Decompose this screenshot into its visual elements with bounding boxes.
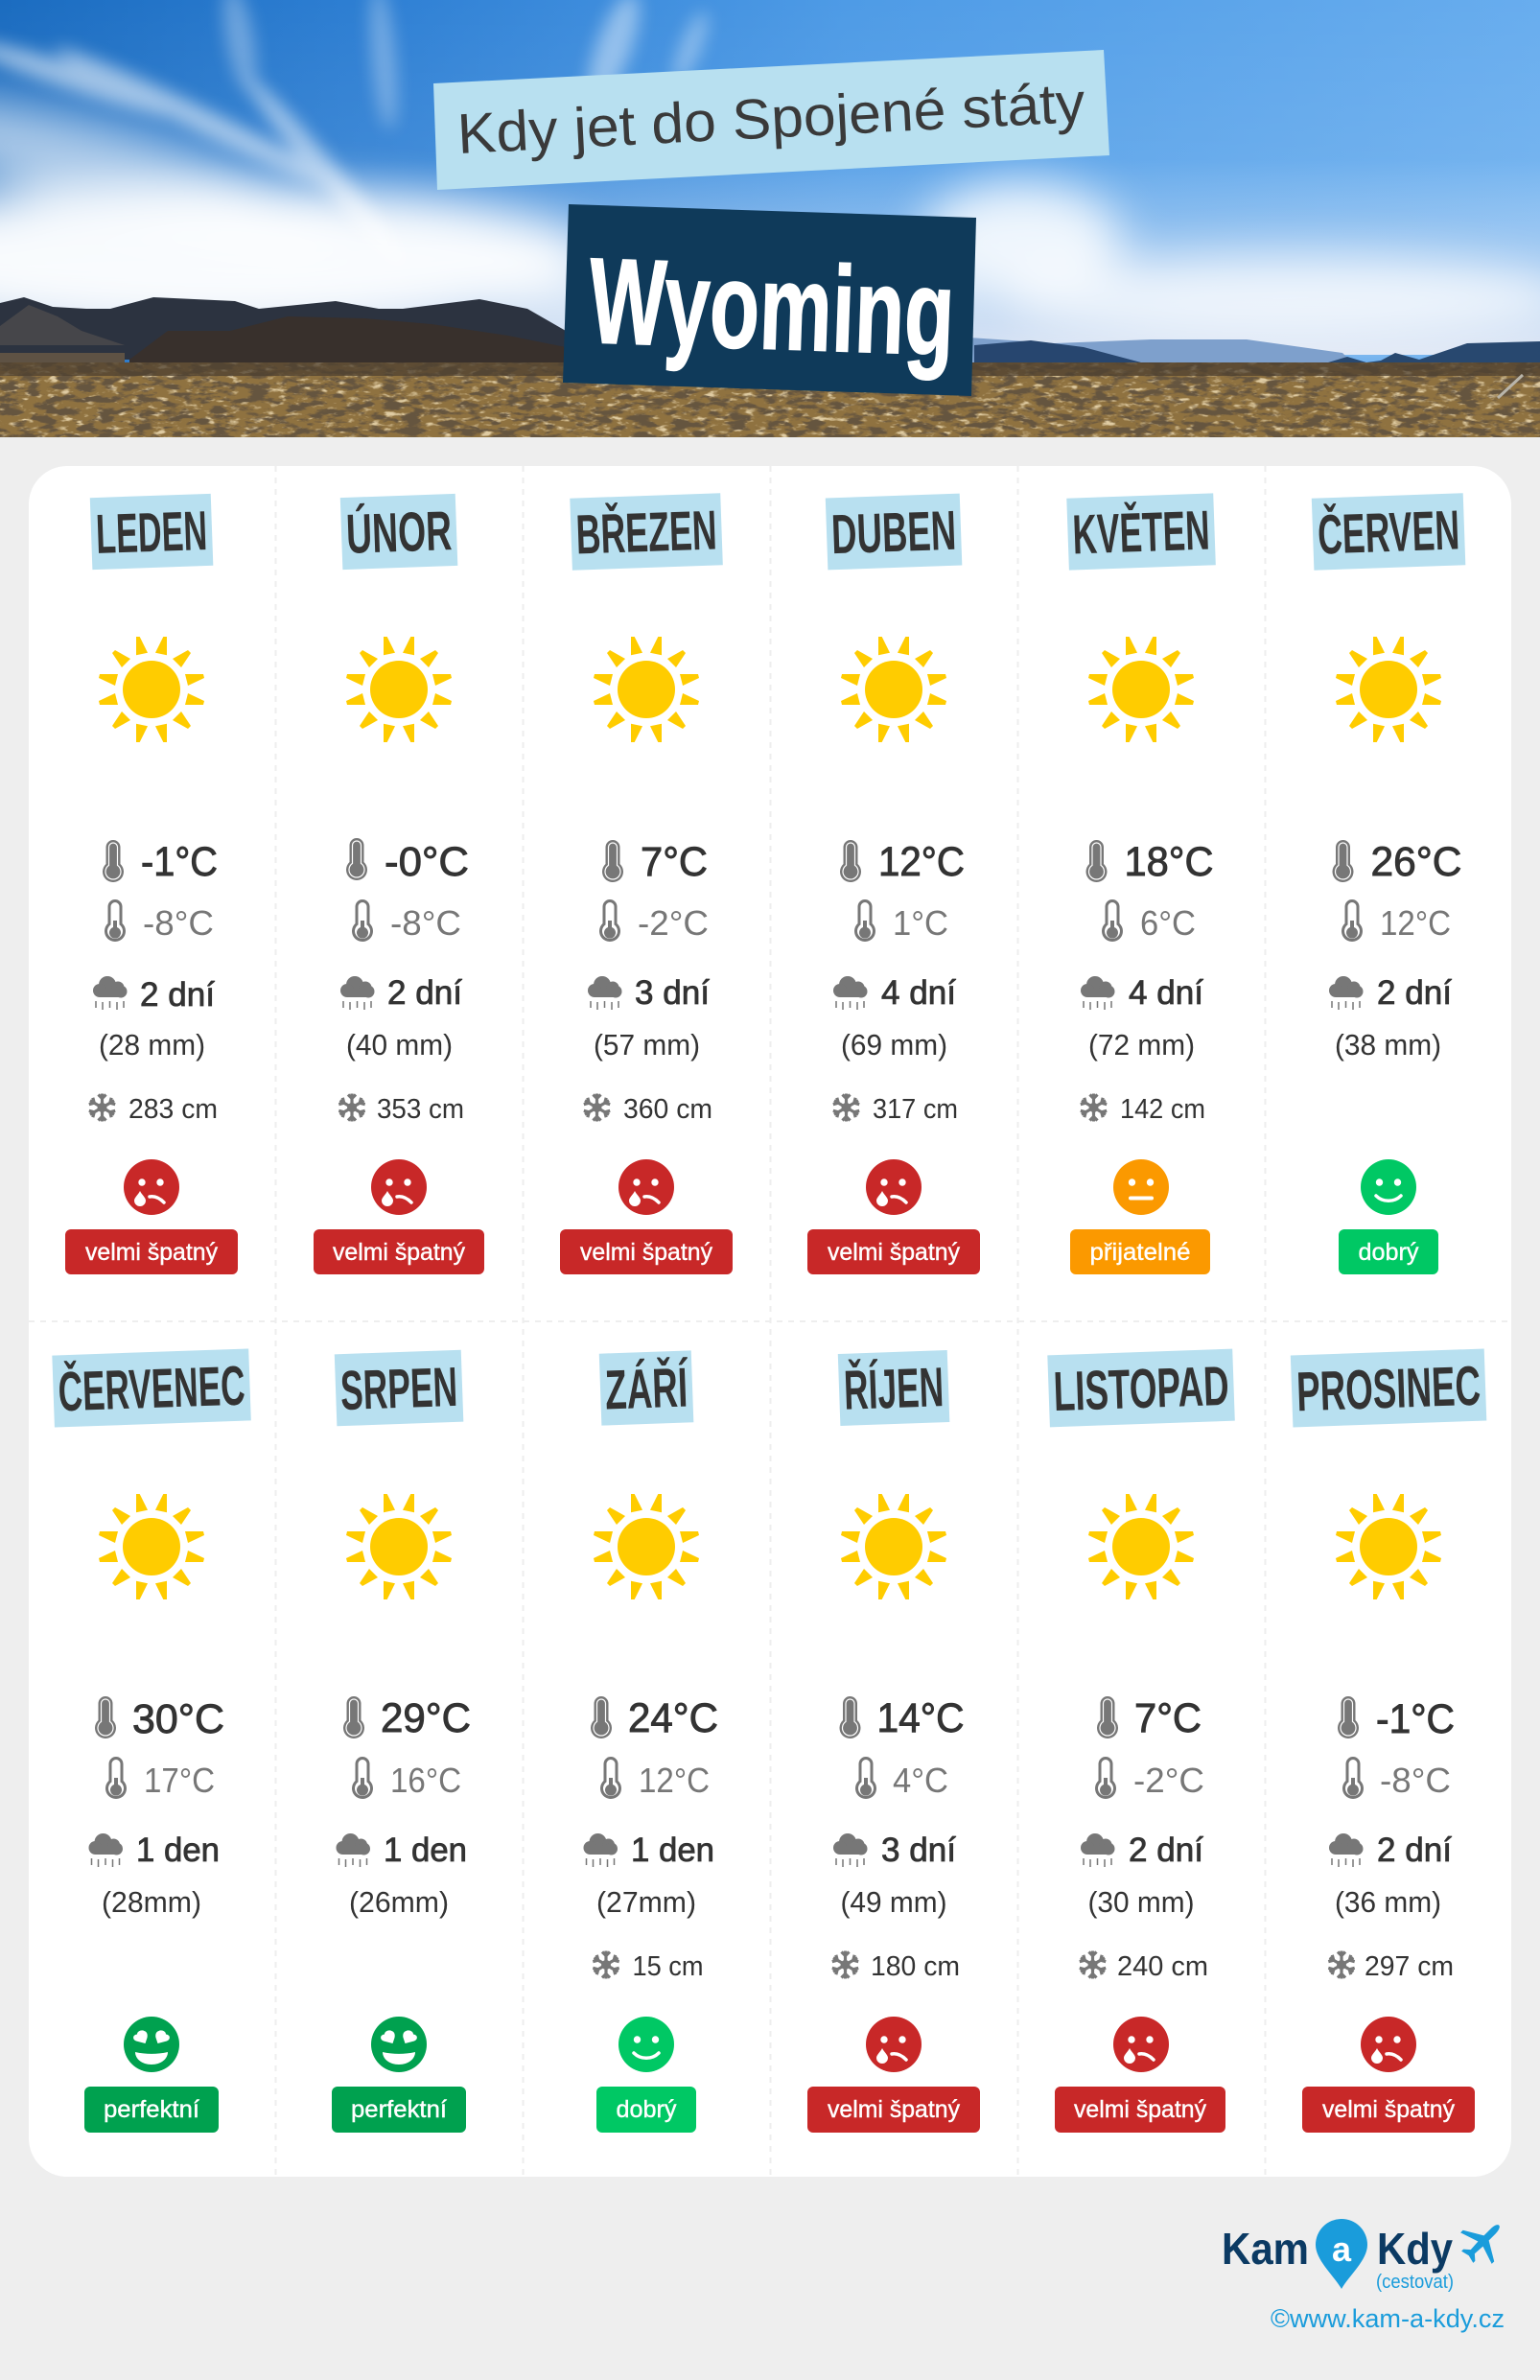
snowfall [1327, 1950, 1454, 1982]
month: Prosinec [1291, 1348, 1486, 2133]
snowfall: 353 cm [377, 1094, 464, 1125]
rating face [1113, 1159, 1169, 1215]
heading: ÚNOR [345, 500, 453, 566]
min temperature: 12°C [639, 1761, 710, 1800]
rating pill: velmi špatný [828, 2096, 960, 2123]
rating pill: velmi špatný [333, 1239, 465, 1266]
max temperature [591, 1695, 718, 1741]
rating face [866, 2017, 922, 2072]
month: Březen [560, 493, 733, 1274]
icon: sun [346, 1494, 452, 1599]
heading [599, 1350, 693, 1426]
rating face [618, 1159, 674, 1215]
rating pill: velmi špatný [1322, 2096, 1455, 2123]
max temperature: 14°C [876, 1695, 965, 1741]
rain days [1081, 974, 1203, 1012]
rain days [1329, 1832, 1452, 1869]
snowfall: 317 cm [873, 1094, 958, 1125]
rain days: 4 dní [1129, 974, 1203, 1012]
max temperature: -1°C [141, 839, 218, 885]
icon: sun [1088, 637, 1194, 742]
heading: KVĚTEN [1071, 500, 1211, 566]
icon: sun [1336, 637, 1441, 742]
icon: map pin: a [1332, 2229, 1352, 2269]
rain days: 2 dní [387, 974, 462, 1012]
state name label: Wyoming [563, 204, 976, 396]
snowfall: 142 cm [1120, 1094, 1205, 1125]
rain days [93, 976, 215, 1014]
rainfall: (26mm) [349, 1885, 449, 1919]
max temperature [840, 1695, 965, 1741]
min temperature: -8°C [1380, 1761, 1451, 1800]
rating pill [65, 1229, 238, 1274]
icon: sun [99, 637, 204, 742]
max temperature [840, 839, 965, 885]
rainfall: (38 mm) [1335, 1028, 1441, 1062]
rain days: 1 den [631, 1832, 714, 1869]
rating face [618, 2017, 674, 2072]
rating pill [1339, 1229, 1438, 1274]
rating face [866, 1159, 922, 1215]
min temperature: 16°C [390, 1761, 461, 1800]
max temperature: 18°C [1124, 839, 1214, 885]
rain days: 2 dní [1377, 974, 1452, 1012]
icon: sun [346, 637, 452, 742]
max temperature: 12°C [878, 839, 965, 885]
heading: DUBEN [830, 500, 957, 566]
logo: Kam a Kdy: Kam [1222, 2224, 1309, 2274]
rain days [833, 1832, 956, 1869]
month: Červenec [52, 1348, 251, 2133]
icon: sun [594, 637, 699, 742]
month: Květen [1066, 493, 1216, 1274]
rating face [1113, 2017, 1169, 2072]
min temperature: 4°C [893, 1761, 948, 1800]
snowfall [832, 1093, 958, 1125]
rating face [1361, 1159, 1416, 1215]
icon: sun [841, 637, 946, 742]
heading [1312, 493, 1465, 571]
rain days: 2 dní [140, 976, 215, 1014]
rating pill [84, 2087, 219, 2133]
min temperature: -2°C [638, 903, 709, 943]
rainfall: (28mm) [102, 1885, 201, 1919]
website credit: ©www.kam-a-kdy.cz [1271, 2304, 1505, 2333]
heading [838, 1350, 949, 1426]
rating pill [807, 1229, 980, 1274]
snowfall [831, 1950, 960, 1982]
icon: sun [594, 1494, 699, 1599]
rain days: 3 dní [635, 974, 710, 1012]
snowfall [1079, 1950, 1208, 1982]
month: Srpen [332, 1350, 471, 2133]
max temperature [343, 1695, 471, 1741]
snowfall [592, 1950, 704, 1982]
icon: sun [841, 1494, 946, 1599]
rain days [88, 1832, 220, 1869]
snowfall: 360 cm [623, 1094, 712, 1125]
state name label: Wyoming: Wyoming [587, 232, 957, 381]
rating face [371, 1159, 427, 1215]
rain days: 3 dní [881, 1832, 956, 1869]
max temperature: 7°C [641, 839, 708, 885]
rain days [1081, 1832, 1203, 1869]
min temperature [600, 1757, 710, 1800]
heading: ČERVENEC [58, 1355, 246, 1423]
logo: Kam a Kdy: (cestovat) [1376, 2272, 1454, 2293]
min temperature: 6°C [1140, 903, 1196, 943]
rainfall: (36 mm) [1335, 1885, 1441, 1919]
rating pill [1302, 2087, 1475, 2133]
snowfall [1080, 1093, 1205, 1125]
rating face [1361, 2017, 1416, 2072]
rainfall: (49 mm) [840, 1885, 947, 1919]
max temperature [1097, 1695, 1202, 1741]
rain days: 2 dní [1377, 1832, 1452, 1869]
heading [1066, 493, 1216, 571]
heading [1047, 1349, 1235, 1427]
rating face [124, 2017, 179, 2072]
rainfall: (27mm) [596, 1885, 696, 1919]
snowfall: 240 cm [1117, 1951, 1208, 1982]
rainfall: (72 mm) [1088, 1028, 1195, 1062]
title label: Kdy jet do Spojené státy [433, 50, 1109, 190]
min temperature: -8°C [390, 903, 461, 943]
snowfall [88, 1093, 218, 1125]
heading [90, 494, 213, 570]
rain days [583, 1832, 714, 1869]
min temperature: -8°C [143, 903, 214, 943]
rating face [371, 2017, 427, 2072]
rating pill: perfektní [104, 2096, 199, 2123]
max temperature: -1°C [1376, 1696, 1455, 1742]
heading: LISTOPAD [1053, 1355, 1230, 1423]
mountains [0, 297, 566, 360]
max temperature: 26°C [1371, 839, 1461, 885]
heading: SRPEN [339, 1356, 458, 1422]
min temperature [1342, 1757, 1451, 1800]
max temperature [346, 838, 469, 885]
month: Duben [807, 494, 980, 1274]
max temperature: 7°C [1134, 1695, 1202, 1741]
rainfall: (69 mm) [841, 1028, 947, 1062]
max temperature [602, 839, 708, 885]
rainfall: (30 mm) [1087, 1885, 1195, 1919]
panel: monthly climate table [29, 466, 1511, 2177]
logo: Kam a Kdy [1222, 2209, 1515, 2293]
rain days [336, 1832, 467, 1869]
rain days: 2 dní [1129, 1832, 1203, 1869]
min temperature [855, 1757, 948, 1800]
title label: Kdy jet do Spojené státy: Kdy jet do Spojené státy [455, 71, 1086, 166]
heading: ŘÍJEN [843, 1356, 945, 1422]
max temperature: 24°C [628, 1695, 718, 1741]
month: Červen [1312, 493, 1465, 1274]
month: Únor [314, 494, 484, 1274]
rating pill: velmi špatný [828, 1239, 960, 1266]
icon: map pin [1316, 2219, 1367, 2289]
rating pill [332, 2087, 466, 2133]
prairie ground [0, 362, 1540, 437]
min temperature: -2°C [1133, 1761, 1204, 1800]
min temperature [1095, 1757, 1204, 1800]
rating face [124, 1159, 179, 1215]
rainfall: (57 mm) [594, 1028, 700, 1062]
snowfall: 283 cm [128, 1094, 218, 1125]
rating pill [560, 1229, 733, 1274]
month: Říjen [807, 1350, 980, 2133]
rating pill [1070, 1229, 1210, 1274]
max temperature [1333, 839, 1461, 885]
rainfall: (28 mm) [99, 1028, 205, 1062]
min temperature [1102, 899, 1196, 943]
rain days: 1 den [136, 1832, 220, 1869]
month: Listopad [1047, 1349, 1235, 2133]
heading: LEDEN [95, 500, 208, 566]
snowfall: 297 cm [1365, 1951, 1454, 1982]
icon: sun [1088, 1494, 1194, 1599]
month: Leden [65, 494, 238, 1274]
min temperature [352, 899, 461, 943]
rain days [588, 974, 710, 1012]
snowfall [583, 1093, 712, 1125]
heading [340, 494, 457, 570]
rain days [1329, 974, 1452, 1012]
header photo: sky and prairie [0, 0, 1540, 437]
rating pill: velmi špatný [1074, 2096, 1206, 2123]
min temperature: 12°C [1380, 903, 1451, 943]
icon: sun [1336, 1494, 1441, 1599]
max temperature [1338, 1696, 1455, 1742]
rain days: 4 dní [881, 974, 956, 1012]
rain days [833, 974, 956, 1012]
min temperature [1342, 899, 1451, 943]
rating pill: přijatelné [1089, 1239, 1191, 1266]
rating pill: dobrý [1358, 1239, 1419, 1266]
heading: BŘEZEN [574, 499, 718, 567]
rain days [340, 974, 462, 1012]
icon: airplane [1452, 2209, 1515, 2273]
rating pill [807, 2087, 980, 2133]
rating pill [596, 2087, 696, 2133]
rating pill: perfektní [351, 2096, 447, 2123]
heading [826, 494, 962, 570]
max temperature: -0°C [385, 839, 469, 885]
rating pill [314, 1229, 484, 1274]
rating pill: velmi špatný [85, 1239, 218, 1266]
snowfall: 15 cm [633, 1951, 704, 1982]
heading [335, 1350, 463, 1426]
max temperature: 30°C [132, 1696, 224, 1742]
rating pill: dobrý [616, 2096, 677, 2123]
rating pill [1055, 2087, 1225, 2133]
min temperature [105, 899, 214, 943]
min temperature: 1°C [893, 903, 948, 943]
heading [570, 493, 723, 571]
max temperature [103, 839, 218, 885]
heading [52, 1348, 251, 1428]
max temperature: 29°C [381, 1695, 471, 1741]
min temperature [854, 899, 948, 943]
snowfall: 180 cm [871, 1951, 960, 1982]
logo: Kam a Kdy: Kdy [1377, 2224, 1453, 2274]
rating pill: velmi špatný [580, 1239, 712, 1266]
rainfall: (40 mm) [346, 1028, 453, 1062]
min temperature [105, 1757, 215, 1800]
min temperature [599, 899, 709, 943]
min temperature: 17°C [144, 1761, 215, 1800]
snowfall [338, 1093, 464, 1125]
rain days: 1 den [384, 1832, 467, 1869]
heading: ZÁŘÍ [604, 1356, 689, 1421]
min temperature [352, 1757, 461, 1800]
max temperature [1085, 839, 1214, 885]
month: Září [583, 1350, 718, 2133]
icon: sun [99, 1494, 204, 1599]
